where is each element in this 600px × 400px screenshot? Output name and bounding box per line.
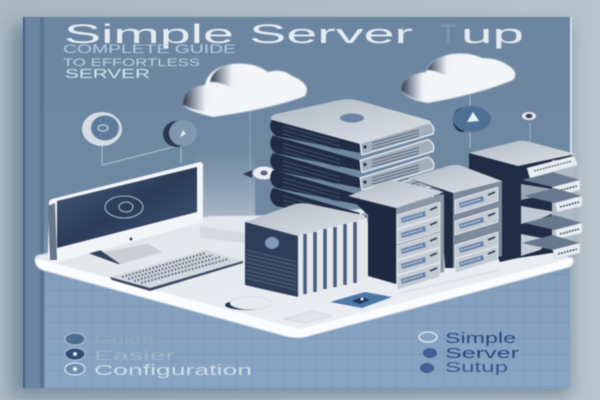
mouse [225, 296, 272, 310]
middle rack top [408, 165, 502, 193]
legend: right [419, 330, 519, 376]
subtitle: TO EFFORTLESS [63, 57, 200, 69]
keyboard [110, 250, 243, 291]
icon: small white ring [243, 166, 275, 180]
center rack [348, 181, 444, 290]
title [64, 19, 524, 49]
cube server [245, 203, 367, 297]
icon: navigation badge [453, 106, 491, 132]
middle rack [408, 165, 502, 273]
screen logo [105, 196, 143, 218]
title: up [461, 19, 524, 49]
icon: ring left [82, 112, 122, 146]
server top badge [340, 114, 364, 122]
legend item: Easier [65, 347, 176, 363]
wall glow behind desk [195, 150, 255, 230]
cube front [245, 222, 298, 297]
blue pad [330, 292, 392, 308]
legend item: Sutup: Sutup [445, 359, 508, 376]
cloud: left [183, 64, 307, 117]
legend item: Simple: Simple [445, 330, 516, 347]
right rack [469, 141, 582, 262]
top shelf front [527, 156, 578, 178]
monitor bezel [48, 162, 203, 262]
cube top [245, 203, 366, 236]
legend: left [65, 332, 252, 379]
icon: small ring right [522, 112, 536, 120]
legend item: Configuration: Configuration [94, 362, 252, 379]
legend item: Guide: Guide [94, 332, 154, 347]
legend item: Guide [65, 332, 154, 347]
legend item: Easier: Easier [94, 347, 176, 363]
subtitle: COMPLETE GUIDE [63, 42, 236, 56]
icon: badge upload [163, 120, 197, 147]
monitor stand [90, 244, 163, 264]
connector lines [102, 95, 530, 190]
book spine [23, 17, 44, 388]
subtitle: SERVER [65, 66, 150, 81]
legend item: Server: Server [445, 345, 519, 362]
server top plate [271, 99, 431, 144]
stacked server [270, 99, 434, 225]
center rack top [348, 181, 444, 208]
cube fins [298, 218, 367, 297]
desk [35, 205, 573, 338]
right rack top [469, 141, 576, 166]
subtitle [63, 42, 236, 81]
legend item: Configuration [65, 362, 252, 379]
title: Simple Server [64, 19, 413, 49]
cloud: right [401, 54, 515, 103]
monitor screen [57, 167, 197, 248]
title: T [440, 19, 456, 49]
monitor [48, 162, 203, 264]
